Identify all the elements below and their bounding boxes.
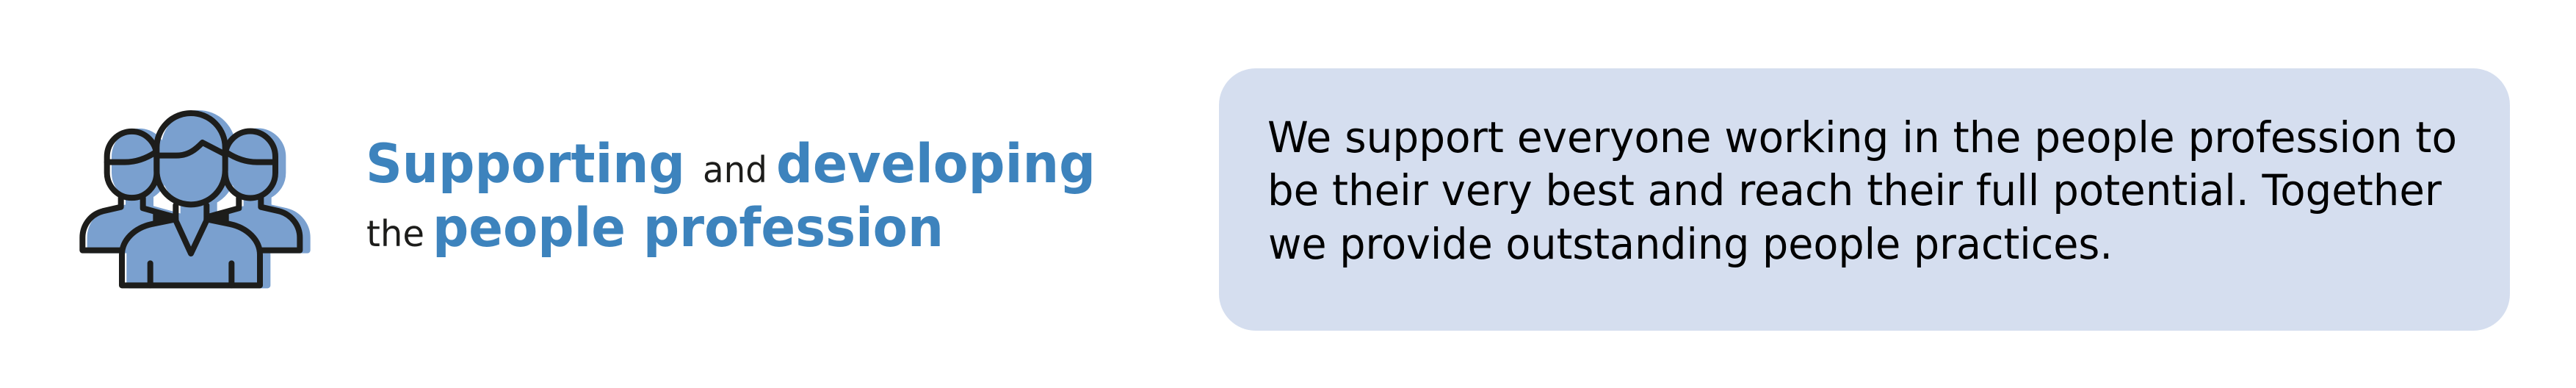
icon: black outlines <box>82 113 300 285</box>
icon: group of three people <box>82 113 308 285</box>
heading words: people profession: people profession <box>433 197 944 259</box>
text block: mission statement: we provide outstanding people practices. <box>1268 219 2113 269</box>
text block: mission statement: We support everyone working in the people profession to <box>1267 112 2457 162</box>
heading word: the: the <box>366 213 424 255</box>
icon: blue offset fill <box>90 113 308 285</box>
heading word: Supporting: Supporting <box>366 133 685 195</box>
icon: dark shoulder wedges <box>153 210 229 223</box>
panel background <box>1219 68 2510 331</box>
text block: mission statement: be their very best and reach their full potential. Together <box>1267 165 2442 215</box>
heading <box>366 133 1096 259</box>
text block: mission statement <box>1267 112 2457 269</box>
heading word: and: and <box>703 149 767 191</box>
panel: mission statement <box>1219 68 2510 331</box>
heading word: developing: developing <box>776 133 1096 195</box>
